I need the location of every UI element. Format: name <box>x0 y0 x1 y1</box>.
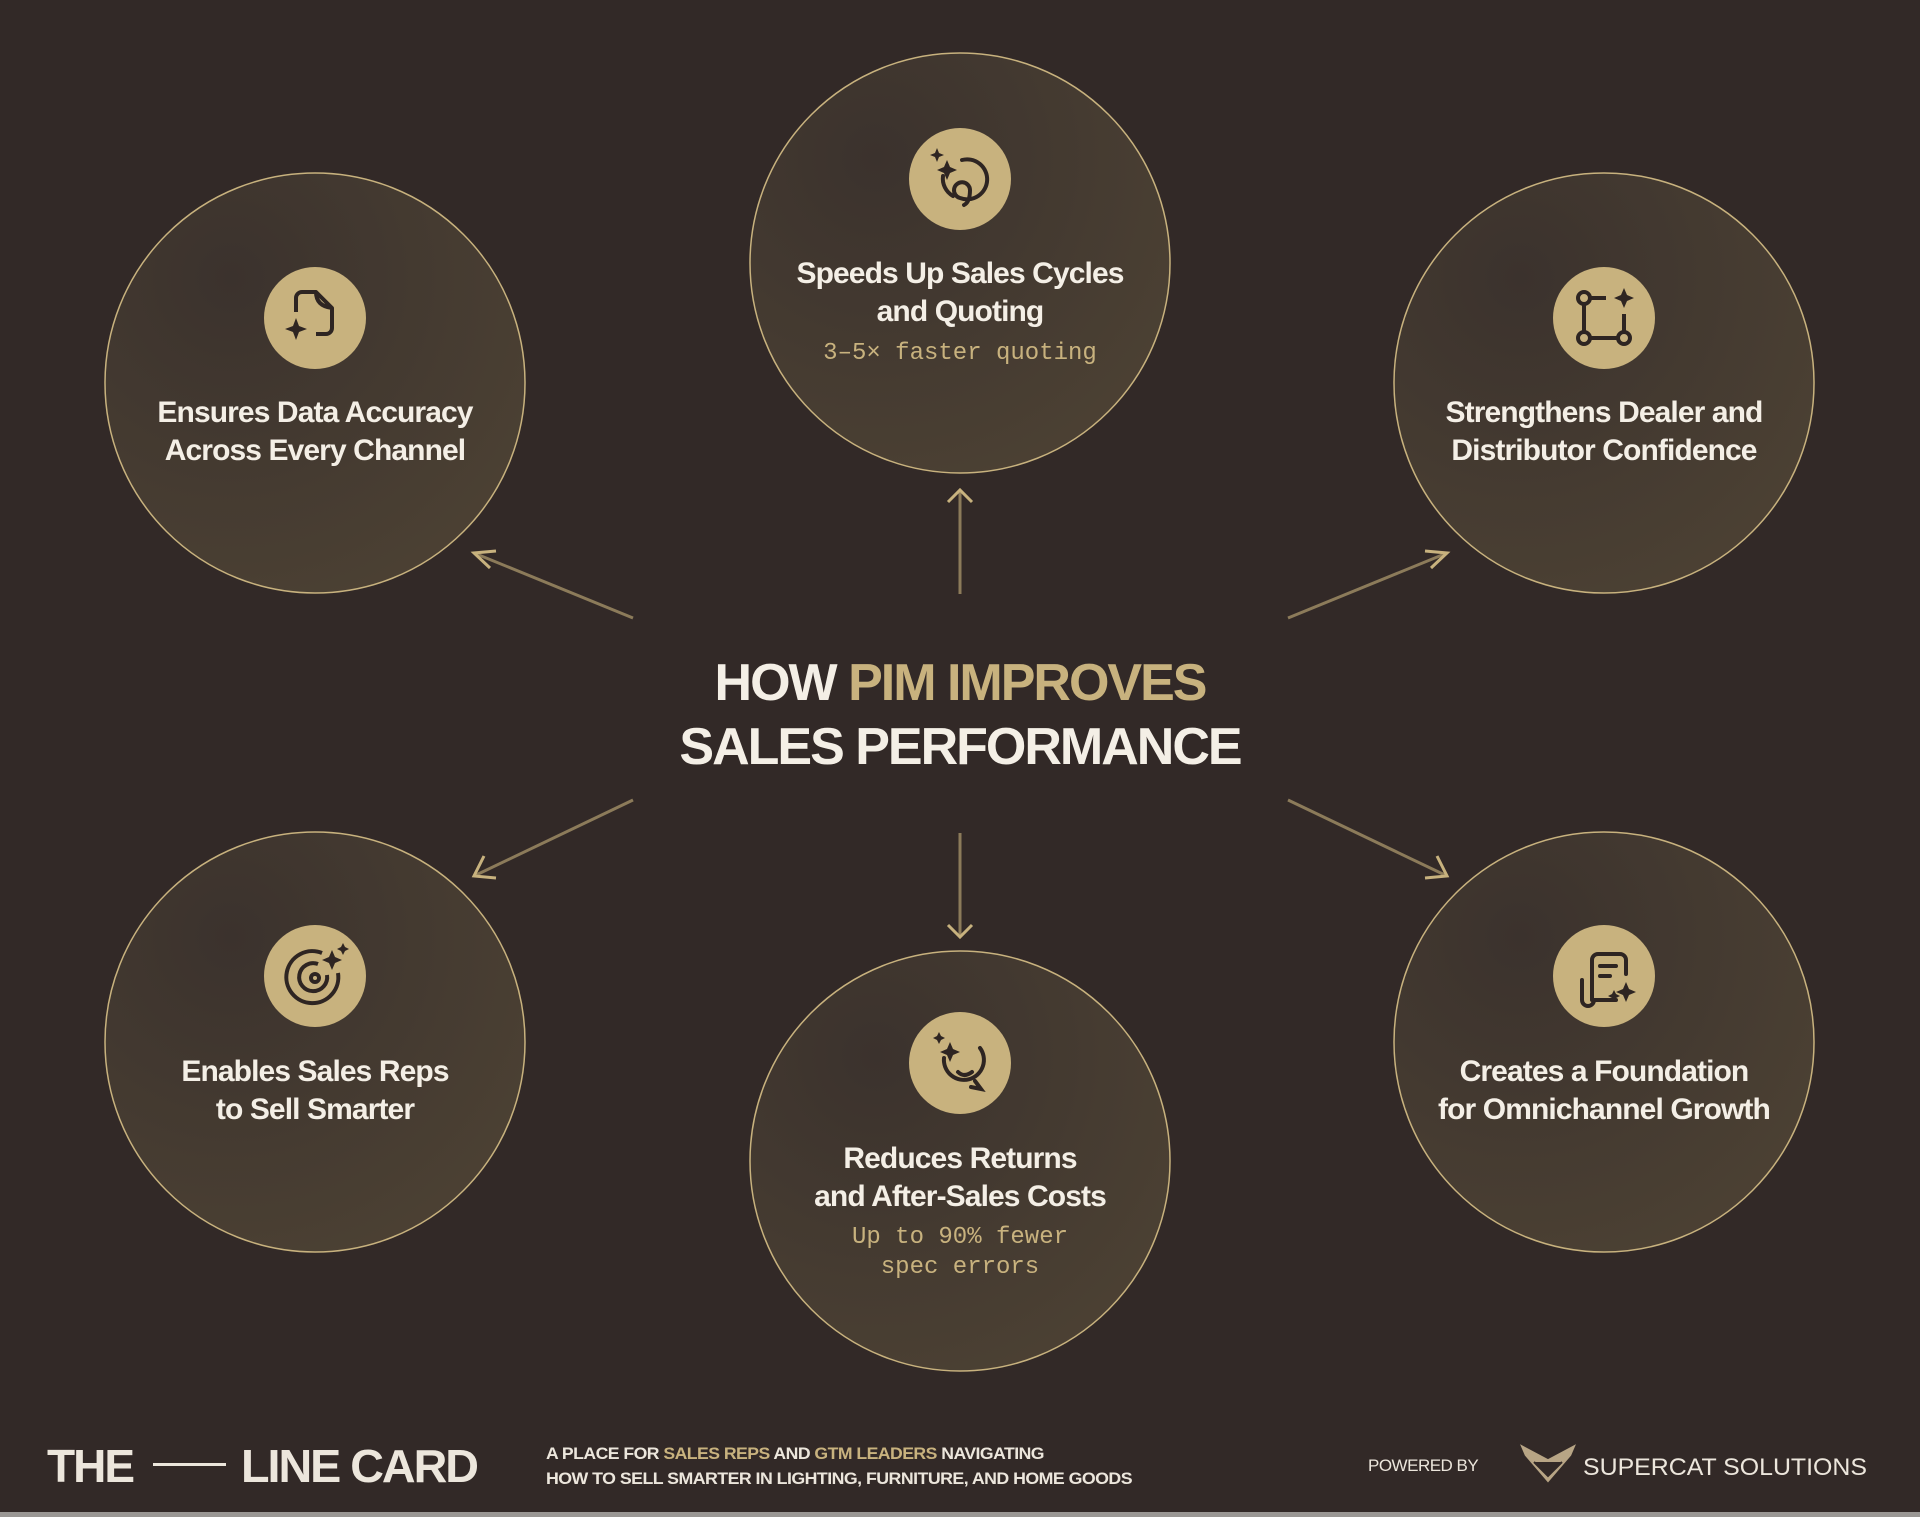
panel: reduces returns: Up to 90% fewer <box>852 1224 1068 1251</box>
icon: target <box>264 925 366 1027</box>
panel: data accuracy: Across Every Channel <box>165 434 465 467</box>
panel: omnichannel growth: for Omnichannel Growth <box>1438 1093 1770 1126</box>
icon: supercat logo <box>1518 1442 1578 1484</box>
footer tagline: HOW TO SELL SMARTER IN LIGHTING, FURNITURE, AND HOME GOODS <box>546 1470 1133 1488</box>
panel: omnichannel growth: Creates a Foundation <box>1460 1055 1748 1088</box>
title: SALES PERFORMANCE <box>679 718 1241 776</box>
panel: sell smarter: Enables Sales Reps <box>181 1055 449 1088</box>
title <box>679 654 1241 776</box>
arrow: bottom-right <box>1288 800 1447 878</box>
arrow: up <box>948 490 972 594</box>
panel: sell smarter: to Sell Smarter <box>216 1093 415 1126</box>
panel: dealer confidence: Strengthens Dealer and <box>1446 396 1762 429</box>
panel: reduces returns: Reduces Returns <box>843 1142 1077 1175</box>
footer tagline: A PLACE FOR SALES REPS AND GTM LEADERS NAVIGATING <box>546 1445 1044 1463</box>
panel: data accuracy: Ensures Data Accuracy <box>157 396 474 429</box>
arrow: down <box>948 833 972 937</box>
icon: chat sparkle <box>909 1012 1011 1114</box>
icon: sparkle loop <box>909 128 1011 230</box>
panel: speeds up sales cycles: and Quoting <box>877 295 1043 328</box>
icon: document sparkle <box>264 267 366 369</box>
panel: omnichannel growth <box>1394 832 1814 1252</box>
title: HOW PIM IMPROVES <box>715 654 1206 712</box>
arrow: bottom-left <box>474 800 633 878</box>
footer tagline <box>546 1445 1133 1488</box>
arrow: top-left <box>474 551 633 618</box>
panel: sell smarter <box>105 832 525 1252</box>
panel: speeds up sales cycles: Speeds Up Sales Cycles <box>796 257 1124 290</box>
panel: dealer confidence: Distributor Confidence <box>1451 434 1757 467</box>
footer powered by: SUPERCAT SOLUTIONS <box>1583 1454 1867 1481</box>
panel: reduces returns: spec errors <box>881 1254 1039 1281</box>
panel: speeds up sales cycles <box>750 53 1170 473</box>
panel: data accuracy <box>105 173 525 593</box>
panel: dealer confidence <box>1394 173 1814 593</box>
panel: reduces returns <box>750 951 1170 1371</box>
footer brand <box>47 1440 478 1492</box>
footer powered by: POWERED BY <box>1368 1456 1478 1475</box>
arrow: top-right <box>1288 551 1447 618</box>
icon: nodes <box>1553 267 1655 369</box>
footer brand: THE <box>47 1440 133 1492</box>
icon: scroll sparkle <box>1553 925 1655 1027</box>
panel: speeds up sales cycles: 3–5× faster quoting <box>823 340 1097 367</box>
footer powered by <box>1368 1442 1867 1484</box>
panel: reduces returns: and After-Sales Costs <box>814 1180 1106 1213</box>
footer brand: LINE CARD <box>241 1440 478 1492</box>
